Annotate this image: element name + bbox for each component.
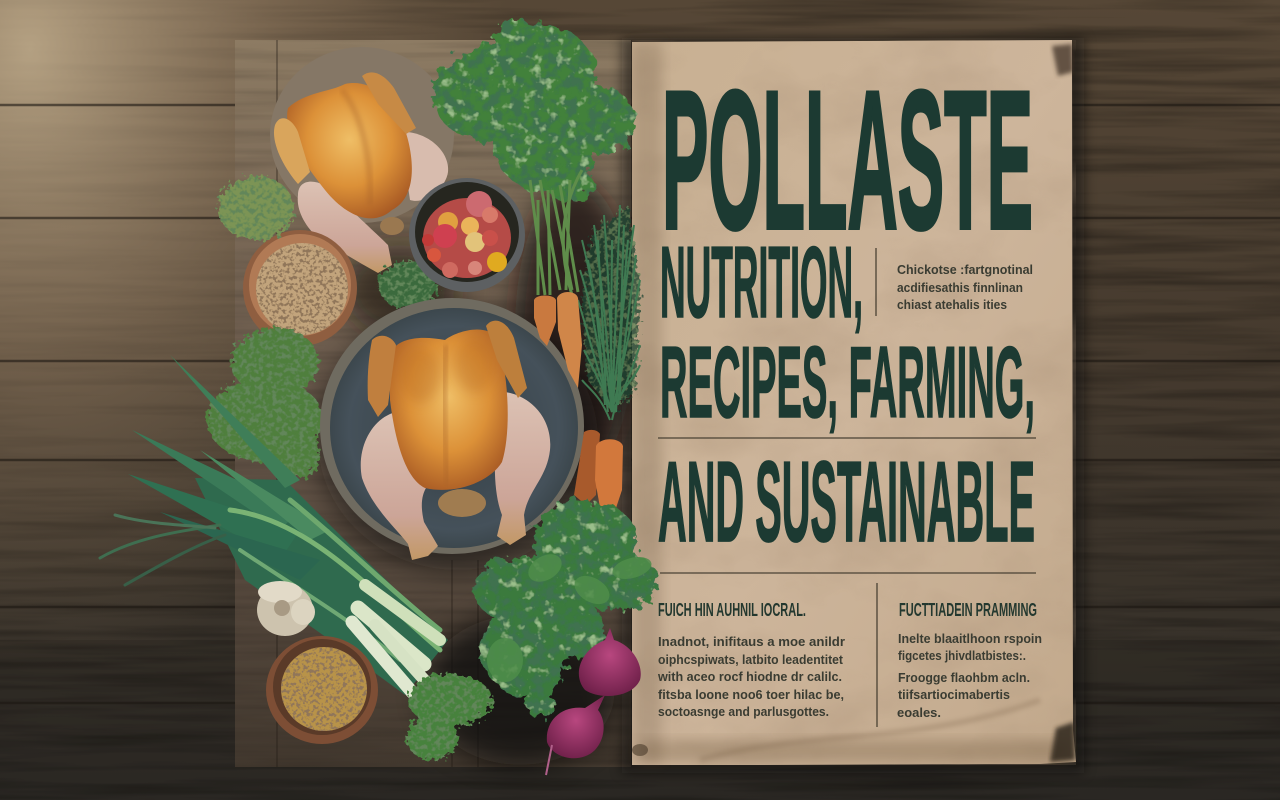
upper onion: [579, 628, 641, 696]
right column body: [897, 632, 1042, 720]
leek body: [195, 478, 448, 695]
carrot greens stems: [530, 170, 582, 295]
intro text block: Chickotse :fartgnotinal: [897, 263, 1033, 277]
breast: [390, 329, 508, 490]
leek blades: [100, 500, 440, 660]
title: NUTRITION,: [660, 227, 863, 339]
left column body: oiphcspiwats, latbito leadentitet: [658, 653, 844, 667]
left column heading: FUICH HIN AUHNIL IOCRAL.: [658, 600, 806, 620]
dividers: [658, 248, 1036, 727]
right column body: Inelte blaaitlhoon rspoin: [898, 632, 1042, 646]
right column: farming text: [897, 600, 1042, 720]
lower onion: [547, 695, 605, 758]
small dill sprigs: [218, 176, 438, 309]
left column body: Inadnot, inifitaus a moe anildr: [658, 635, 845, 649]
wooden board: [235, 40, 635, 767]
leek tapered blades: [128, 355, 330, 580]
left wing: [368, 336, 396, 417]
grain bowl: [243, 230, 357, 346]
leeks: [100, 355, 448, 695]
right column body: figcetes jhivdlatbistes:.: [898, 649, 1026, 663]
lower drumstick: [298, 182, 392, 273]
top roasted chicken: [274, 72, 448, 273]
large dill bunch: [207, 328, 323, 479]
leek root dill: [406, 674, 492, 760]
left column body: soctoasnge and parlusgottes.: [658, 705, 829, 719]
left leg: [361, 412, 438, 560]
large lower leaves: [487, 549, 654, 682]
right column body: eoales.: [897, 706, 941, 720]
left column body: [657, 635, 845, 719]
right leg: [495, 392, 550, 545]
intro text block: chiast atehalis ities: [897, 298, 1007, 312]
fruit and vegetable bowl: [409, 178, 525, 292]
intro text block: acdifiesathis finnlinan: [897, 281, 1023, 295]
lentil bowl: [266, 636, 378, 744]
right wing: [486, 321, 527, 398]
red onions: [546, 628, 641, 775]
right wing: [362, 72, 416, 134]
carrots: [534, 292, 623, 520]
right column heading: FUCTTIADEIN PRAMMING: [899, 600, 1037, 620]
right column body: Froogge flaohbm acln.: [898, 671, 1030, 685]
neck stuffing: [438, 489, 486, 517]
breast: [287, 83, 412, 218]
left wing: [274, 118, 310, 184]
title: [658, 50, 1035, 566]
leek white ends: [352, 585, 440, 692]
parsley bunch: [432, 16, 636, 203]
left column: nutrition text: [657, 600, 845, 719]
intro text block: [897, 263, 1033, 312]
large plate: [320, 298, 584, 554]
fern greens: [578, 205, 640, 420]
top plate: [270, 47, 454, 223]
lower greens: [473, 500, 658, 720]
large roasted chicken: [361, 321, 550, 560]
garlic bulb: [257, 581, 315, 636]
paper poster: [622, 38, 1084, 773]
right thigh: [400, 132, 448, 201]
left column body: fitsba loone noo6 toer hilac be,: [658, 688, 844, 702]
right column body: tiifsartiocimabertis: [898, 688, 1010, 702]
left column body: with aceo rocf hiodne dr calilc.: [657, 670, 842, 684]
